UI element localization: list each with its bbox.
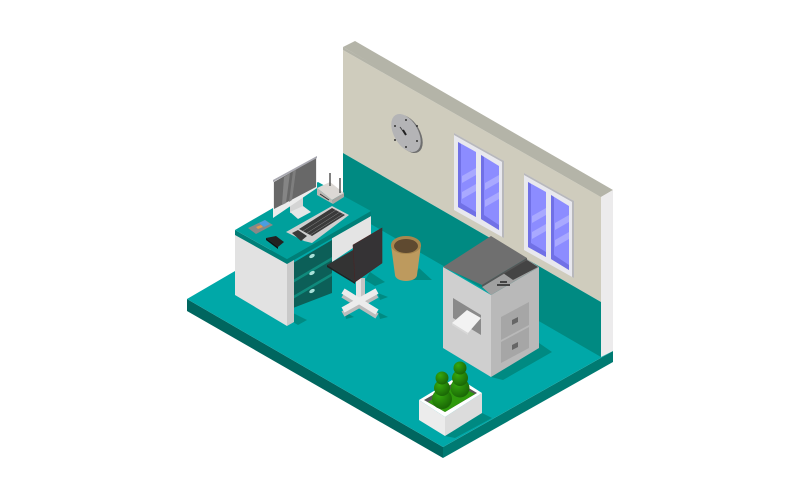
wall clock: [391, 108, 423, 160]
photocopier: [443, 236, 552, 380]
floor slab: [187, 208, 613, 458]
window 2: [524, 173, 574, 278]
chair: [327, 228, 388, 319]
monitor: [273, 156, 317, 219]
router: [317, 173, 344, 204]
desk: [235, 182, 371, 326]
keyboard: [286, 206, 349, 243]
planter with shrubs: [419, 362, 492, 438]
phone: [266, 236, 284, 249]
waste bin: [391, 236, 432, 281]
calculator: [248, 220, 273, 234]
window 1: [454, 133, 504, 238]
back wall: [343, 41, 613, 357]
